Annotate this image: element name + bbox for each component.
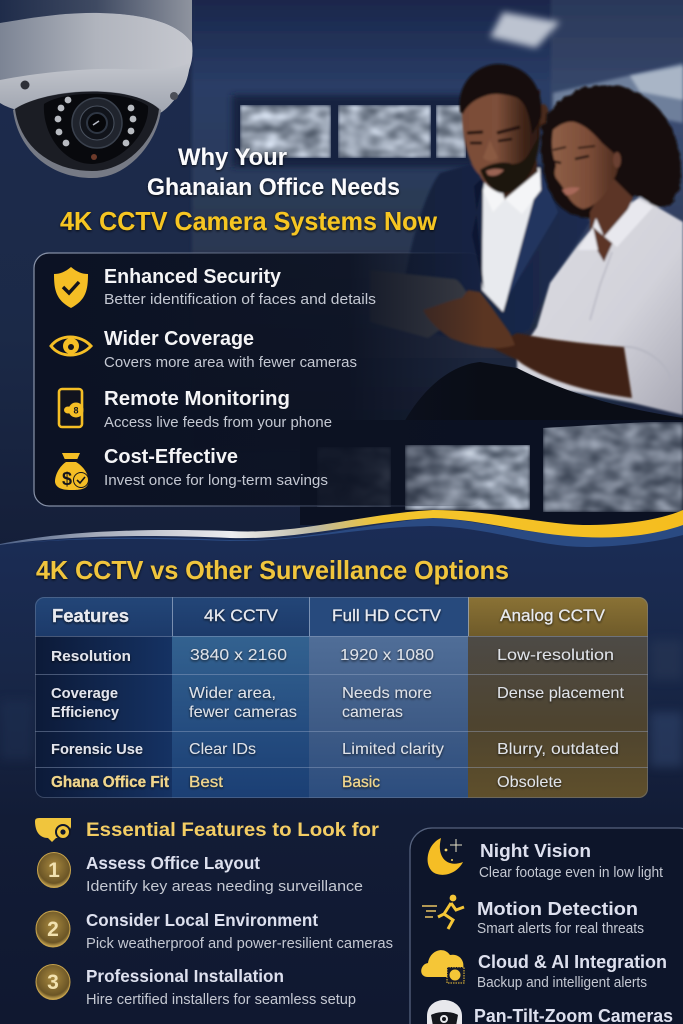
step 1: Assess Office Layout [86, 853, 260, 873]
row: forensic use: Limited clarity [342, 741, 444, 758]
table header row: 4K CCTV [204, 606, 279, 625]
benefit: remote monitoring: Remote Monitoring [104, 388, 290, 410]
essential features section [35, 818, 393, 1008]
step 2: Pick weatherproof and power-resilient cameras [86, 935, 393, 952]
step 1: 1 [48, 859, 60, 882]
feature: night vision [428, 838, 663, 881]
step 2: Consider Local Environment [86, 910, 318, 930]
benefit: cost-effective [55, 446, 328, 490]
section heading: Essential Features to Look for [86, 819, 379, 841]
row: coverage efficiency: Dense placement [497, 685, 625, 702]
lower monitors [300, 420, 683, 525]
comparison heading: 4K CCTV vs Other Surveillance Options [36, 555, 509, 585]
benefit: remote monitoring [59, 388, 332, 431]
step 1 [38, 852, 363, 895]
row: coverage efficiency: cameras [342, 704, 403, 721]
row: ghana office fit: Basic [342, 774, 380, 791]
benefit: wider coverage: Covers more area with fewer cameras [104, 355, 357, 371]
row: resolution: 3840 x 2160 [190, 647, 287, 664]
comparison table [35, 597, 648, 798]
row: coverage efficiency: Needs more [342, 685, 432, 702]
step 3: Hire certified installers for seamless setup [86, 991, 356, 1008]
step 3: Professional Installation [86, 966, 284, 986]
wave ribbon [0, 510, 683, 547]
background office scene [0, 0, 683, 560]
wall monitors [240, 63, 683, 158]
row: forensic use: Blurry, outdated [497, 741, 619, 758]
title: 4K CCTV Camera Systems Now [60, 206, 438, 236]
row: coverage efficiency: Efficiency [51, 705, 119, 721]
step 2: 2 [47, 918, 59, 941]
benefit: cost-effective: Invest once for long-term savings [104, 473, 328, 489]
ceiling light [490, 12, 560, 48]
benefit: wider coverage [51, 328, 357, 371]
row: resolution [51, 647, 614, 665]
benefit: remote monitoring: Access live feeds from your phone [104, 415, 332, 431]
table header row: Features [52, 606, 129, 626]
row: resolution: Low-resolution [497, 647, 614, 664]
row: ghana office fit: Obsolete [497, 774, 562, 791]
feature: cloud and AI [421, 950, 667, 991]
row: coverage efficiency: Wider area, [189, 685, 276, 702]
table header row: Analog CCTV [500, 606, 606, 625]
tablet and hands [370, 270, 632, 398]
row: coverage efficiency: fewer cameras [189, 704, 297, 721]
man [395, 64, 590, 340]
benefit: wider coverage: Wider Coverage [104, 328, 254, 350]
benefit: enhanced security: Enhanced Security [104, 266, 282, 288]
row: resolution: Resolution [51, 649, 131, 665]
lower section background [0, 515, 683, 1024]
row: ghana office fit: Best [189, 774, 224, 791]
title: Ghanaian Office Needs [147, 174, 400, 201]
woman [517, 85, 683, 415]
title [60, 144, 438, 236]
row: forensic use [51, 741, 619, 758]
row: ghana office fit: Ghana Office Fit [51, 774, 169, 791]
benefit: cost-effective: Cost-Effective [104, 446, 238, 468]
row: forensic use: Clear IDs [189, 741, 256, 758]
row: ghana office fit [51, 774, 562, 791]
row: coverage efficiency [51, 685, 625, 721]
step 1: Identify key areas needing surveillance [86, 878, 363, 895]
feature: motion detection: Motion Detection [477, 898, 638, 919]
row: coverage efficiency: Coverage [51, 686, 118, 702]
benefit: enhanced security [54, 266, 376, 308]
benefits panel [34, 253, 484, 506]
feature: night vision: Night Vision [480, 840, 591, 861]
faint blurred monitors behind table [0, 640, 683, 767]
feature: cloud and AI: Backup and intelligent alerts [477, 975, 647, 991]
feature: night vision: Clear footage even in low light [479, 865, 663, 881]
table header row: Full HD CCTV [332, 606, 442, 625]
step 3 [36, 964, 356, 1008]
security camera [0, 0, 192, 178]
feature: cloud and AI: Cloud & AI Integration [478, 951, 667, 972]
benefit: enhanced security: Better identification of faces and details [104, 292, 376, 308]
step 2 [36, 910, 393, 952]
benefit: remote monitoring: 8 [73, 406, 79, 416]
features panel [410, 828, 683, 1024]
benefit: cost-effective: $ [62, 469, 72, 489]
feature: motion detection [422, 895, 644, 937]
table header row [52, 606, 606, 626]
feature: PTZ cameras [427, 1000, 673, 1024]
feature: motion detection: Smart alerts for real threats [477, 921, 644, 937]
title: Why Your [178, 144, 287, 171]
step 3: 3 [47, 971, 59, 994]
row: forensic use: Forensic Use [51, 742, 143, 758]
row: resolution: 1920 x 1080 [340, 647, 434, 664]
icon: camera [35, 818, 71, 842]
trousers [400, 362, 683, 432]
